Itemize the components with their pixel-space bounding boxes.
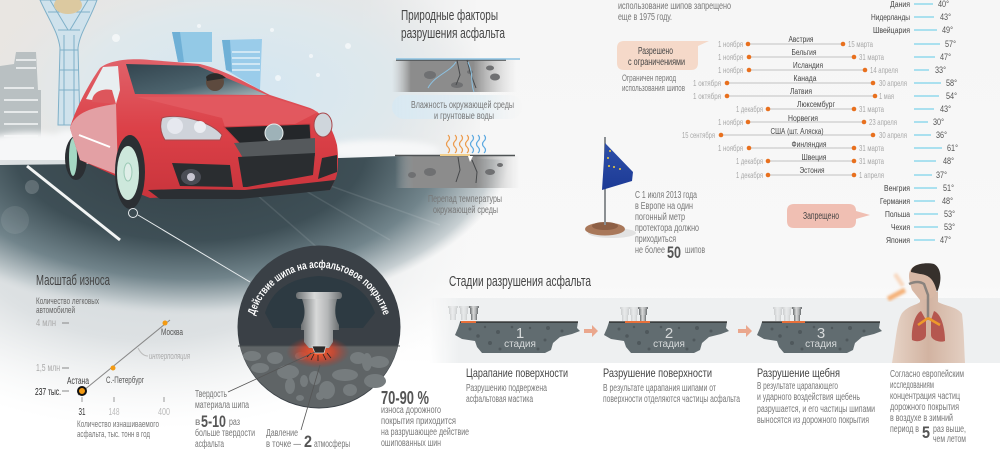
chart: allowed periods by country: Норвегия: [788, 114, 818, 123]
heat glow: [286, 336, 350, 368]
chart: cars vs asphalt wear: 148: [108, 407, 120, 418]
badge: allowed with limits: [617, 41, 709, 70]
icon: temperature waves: [446, 135, 486, 153]
heading: Масштаб износа: [36, 272, 110, 289]
text: point pressure: [266, 428, 350, 451]
chart: allowed periods by country: 15 марта: [848, 40, 873, 49]
text: 70-90 percent: на разрушающее действие: [381, 427, 469, 438]
text: stage 2: [603, 366, 740, 405]
chart: allowed periods by country: Финляндия: [792, 140, 826, 149]
text: stage 3: [757, 366, 875, 426]
illustration: stage 1: [448, 306, 580, 353]
chart: latitude values: 51°: [943, 183, 954, 193]
chart: cars vs asphalt wear: 31: [78, 407, 86, 418]
chart: latitude values: Германия: [880, 197, 910, 206]
text: 70-90 percent: 70-90 %: [381, 388, 429, 408]
chart: allowed periods by country: 1 декабря: [736, 105, 763, 114]
text: y axis caption: автомобилей: [36, 305, 75, 315]
text: ban note: [618, 1, 731, 23]
text: moisture: [392, 95, 522, 122]
chart: cars vs asphalt wear: Москва: [161, 327, 183, 337]
text: stage 2: В результате царапания шипами от: [603, 383, 716, 394]
diagram: stud action on asphalt: [238, 246, 400, 408]
text: limited period: [622, 73, 685, 93]
illustration: stage 1: 1: [516, 325, 524, 342]
text: stage 2: поверхности отделяются частицы асфальта: [603, 393, 740, 405]
headlights: [161, 116, 222, 140]
text: winter concentration: раз выше,: [933, 424, 966, 435]
text: x axis caption: Количество изнашиваемого: [77, 419, 159, 429]
stones: [243, 351, 389, 401]
chart: latitude values: 43°: [940, 104, 951, 114]
text: 50 studs rule: С 1 июля 2013 года: [635, 190, 697, 201]
text: 50 studs rule: протектора должно: [635, 223, 699, 234]
text: 70-90 percent: износа дорожного: [381, 405, 441, 416]
illustration: stage 2: стадия: [653, 339, 685, 350]
illustration: human lungs: [888, 263, 965, 363]
badge: allowed with limits: с ограничениями: [628, 57, 685, 68]
text: 50 studs rule: не более: [635, 244, 665, 256]
chart: allowed periods by country: 31 марта: [859, 157, 884, 166]
text: limited period: Ограничен период: [622, 73, 677, 83]
text: stage 3: выносятся из дорожного покрытия: [757, 415, 869, 426]
chart: allowed periods by country: Канада: [794, 74, 817, 83]
chart: allowed periods by country: Эстония: [800, 166, 824, 175]
text: stud hardness: 5-10: [201, 412, 226, 431]
chart: cars vs asphalt wear: 1,5 млн: [36, 363, 60, 374]
chart: latitude values: Нидерланды: [871, 13, 910, 22]
text: 50 studs rule: в Европе на один: [635, 201, 693, 212]
chart: latitude values: 36°: [936, 130, 947, 140]
text: 50 studs rule: погонный метр: [635, 212, 685, 223]
text: 50 studs rule: шипов: [685, 245, 705, 256]
text: 50 studs rule: [635, 190, 705, 262]
illustration: stage 1: стадия: [504, 339, 536, 350]
text: winter concentration: период в: [890, 424, 919, 435]
chart: latitude values: 43°: [940, 12, 951, 22]
chart: allowed periods by country: Люксембург: [797, 100, 835, 109]
chart: latitude values: 48°: [942, 196, 953, 206]
illustration: stage 3: 3: [817, 325, 825, 342]
text: winter concentration: Согласно европейским: [890, 369, 964, 380]
chart: allowed periods by country: 1 апреля: [859, 171, 884, 180]
icon: metal stud: [296, 292, 342, 361]
chart: latitude values: 33°: [935, 65, 946, 75]
icon: Baiterek tower: [40, 0, 97, 125]
text: ban note: еще в 1975 году.: [618, 12, 672, 23]
chart: allowed periods by country: 31 марта: [859, 53, 884, 62]
chart: latitude values: 61°: [947, 143, 958, 153]
chart: latitude values: Япония: [886, 236, 910, 245]
text: ban note: использование шипов запрещено: [618, 1, 731, 12]
heading: разрушения асфальта: [401, 25, 505, 42]
text: stage 3: Разрушение щебня: [757, 366, 840, 380]
chart: allowed periods by country: 1 ноября: [718, 53, 743, 62]
chart: allowed periods by country: Бельгия: [792, 48, 816, 57]
chart: cars vs asphalt wear: 4 млн: [36, 318, 56, 329]
badge: allowed with limits: Разрешено: [638, 46, 673, 57]
chart: latitude values: Польша: [885, 210, 910, 219]
chart: allowed periods by country: 23 апреля: [869, 118, 897, 127]
chart: allowed periods by country: 1 ноября: [718, 118, 743, 127]
chart: latitude values: 49°: [942, 25, 953, 35]
chart: allowed periods by country: 30 апреля: [879, 79, 907, 88]
grille: [224, 124, 311, 146]
text: 70-90 percent: покрытия приходится: [381, 416, 456, 427]
chart: latitude values: [871, 0, 958, 245]
text: 70-90 percent: ошипованных шин: [381, 438, 441, 449]
chart: allowed periods by country: Австрия: [788, 35, 814, 44]
text: x axis caption: асфальта, тыс. тонн в год: [77, 429, 151, 439]
text: stud hardness: материала шипа: [195, 400, 249, 411]
curved title: Действие шипа на асфальтовое покрытие: [248, 260, 389, 316]
icon: grey city buildings: [0, 52, 41, 150]
illustration: stage 3: [757, 307, 882, 353]
text: winter concentration: [890, 369, 966, 445]
leader lines: [228, 352, 320, 430]
chart: latitude values: 30°: [933, 117, 944, 127]
chart: allowed periods by country: Исландия: [793, 61, 823, 70]
text: stud hardness: Твердость: [195, 389, 227, 400]
chart: latitude values: 54°: [946, 91, 957, 101]
text: stage 3: и ударного воздействия щебень: [757, 391, 860, 403]
chart: latitude values: 47°: [940, 235, 951, 245]
text: winter concentration: концентрация частиц: [890, 391, 960, 402]
snow dots: [1, 24, 351, 234]
text: stud hardness: раз: [229, 417, 240, 428]
text: point pressure: атмосферы: [314, 438, 350, 450]
chart: allowed periods by country: Швеция: [802, 153, 826, 162]
chart: allowed periods by country: 31 марта: [859, 105, 884, 114]
chart: allowed periods by country: 1 октября: [693, 92, 721, 101]
text: stage 3: разрушается, и его частицы шипами: [757, 404, 875, 415]
car: [65, 59, 338, 209]
text: stage 1: Разрушению подвержена: [466, 383, 547, 394]
text: stage 1: [466, 366, 568, 405]
text: moisture: и грунтовые воды: [434, 111, 494, 122]
text: point pressure: в точке —: [266, 439, 301, 450]
chart: latitude values: 57°: [945, 39, 956, 49]
panel: regulations: [585, 0, 958, 262]
chart: cars vs asphalt wear: 237 тыс.: [35, 387, 61, 398]
text: 50 studs rule: приходиться: [635, 234, 676, 245]
chart: latitude values: 48°: [943, 156, 954, 166]
road haze: [0, 160, 480, 430]
text: point pressure: 2: [304, 432, 312, 451]
road: [0, 156, 510, 320]
text: stud hardness: в: [195, 417, 200, 428]
chart: allowed periods by country: 1 ноября: [718, 66, 743, 75]
text: temperature: [428, 194, 502, 216]
text: y axis caption: Количество легковых: [36, 296, 99, 306]
illustration: temperature damage: [395, 155, 520, 188]
arrow: [738, 325, 752, 337]
illustration: stage 3: стадия: [805, 339, 837, 350]
panel: destruction stages: [430, 273, 1000, 426]
chart: allowed periods by country: 14 апреля: [870, 66, 898, 75]
text: point pressure: Давление: [266, 428, 298, 439]
text: stage 3: В результате царапающего: [757, 381, 838, 392]
chart: allowed periods by country: 31 марта: [859, 144, 884, 153]
panel: natural factors: [392, 7, 522, 216]
text: winter concentration: дорожного покрытия: [890, 402, 959, 413]
text: stage 1: асфальтовая мастика: [466, 393, 533, 405]
illustration: car on a winter road: [0, 0, 510, 430]
text: stage 2: Разрушение поверхности: [603, 366, 712, 380]
heading: Стадии разрушения асфальта: [449, 273, 591, 290]
icon: EU flag: [585, 137, 636, 238]
badge: banned: [787, 204, 870, 228]
heading: Природные факторы: [401, 7, 498, 24]
heading: [401, 7, 505, 42]
pointer from wheel to stud detail: [128, 208, 250, 282]
chart: latitude values: Дания: [890, 0, 910, 9]
chart: latitude values: 58°: [946, 78, 957, 88]
chart: allowed periods by country: 1 декабря: [736, 157, 763, 166]
text: stage 1: Царапание поверхности: [466, 366, 568, 380]
road marking: [27, 166, 120, 240]
chart: latitude values: 53°: [944, 209, 955, 219]
chart: latitude values: 37°: [936, 170, 947, 180]
chart: allowed periods by country: 1 мая: [879, 92, 894, 101]
chart: cars vs asphalt wear: интерполяция: [149, 351, 190, 361]
arrow: [584, 325, 598, 337]
badge: banned: Запрещено: [803, 211, 839, 222]
illustration: stage 2: 2: [665, 325, 673, 342]
chart: cars vs asphalt wear: Астана: [67, 376, 89, 387]
chart: allowed periods by country: 30 апреля: [879, 131, 907, 140]
illustration: stage 2: [604, 307, 729, 353]
chart: allowed periods by country: 1 ноября: [718, 144, 743, 153]
text: moisture: Влажность окружающей среды: [411, 100, 514, 111]
chart: latitude values: Чехия: [891, 223, 910, 232]
illustration: moisture damage: [392, 59, 520, 92]
front wheel: [115, 135, 145, 209]
text: stud hardness: асфальта: [195, 438, 224, 450]
chart: allowed periods by country: Латвия: [790, 87, 812, 96]
chart: cars vs asphalt wear: С.-Петербург: [106, 375, 144, 385]
text: limited period: использования шипов: [622, 83, 685, 93]
chart: cars vs asphalt wear: [35, 318, 190, 418]
mist over the horizon: [0, 130, 440, 168]
icon: blue towers: [172, 32, 262, 90]
background band: [430, 298, 1000, 363]
chart: allowed periods by country: 1 декабря: [736, 171, 763, 180]
text: temperature: Перепад температуры: [428, 194, 502, 205]
chart: allowed periods by country: [682, 35, 907, 180]
panel: wear scale: [35, 272, 190, 439]
chart: latitude values: 47°: [940, 52, 951, 62]
text: stud hardness: [195, 389, 255, 450]
text: winter concentration: 5: [922, 423, 930, 442]
text: winter concentration: исследованиям: [890, 380, 934, 391]
chart: latitude values: Венгрия: [884, 184, 910, 193]
text: winter concentration: чем летом: [933, 434, 966, 445]
text: winter concentration: в воздухе в зимний: [890, 413, 953, 424]
text: 70-90 percent: [381, 388, 469, 449]
chart: cars vs asphalt wear: 400: [158, 407, 170, 418]
text: temperature: окружающей среды: [433, 205, 498, 216]
chart: allowed periods by country: 15 сентября: [682, 131, 715, 140]
chart: latitude values: Швейцария: [873, 26, 910, 35]
chart: allowed periods by country: 1 октября: [693, 79, 721, 88]
chart: allowed periods by country: США (шт. Аляска): [770, 127, 824, 136]
text: x axis caption: [77, 419, 159, 439]
text: stud hardness: больше твердости: [195, 427, 255, 439]
chart: allowed periods by country: 1 ноября: [718, 40, 743, 49]
chart: latitude values: 53°: [944, 222, 955, 232]
text: 50 studs rule: 50: [667, 243, 681, 262]
text: y axis caption: [36, 296, 99, 315]
